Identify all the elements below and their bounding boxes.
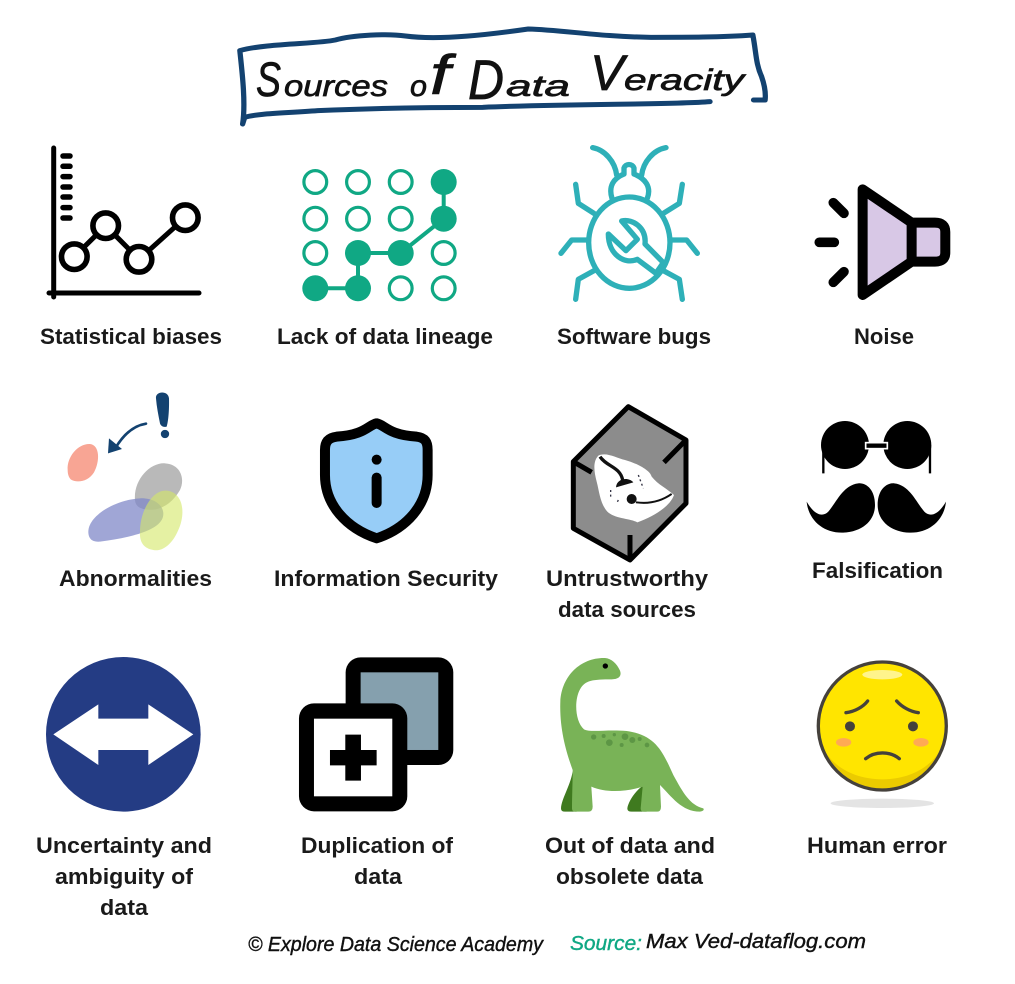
title text: f	[430, 43, 457, 106]
label: noise: Noise	[854, 324, 914, 349]
title: hand-drawn frame and heading	[240, 29, 765, 124]
label: human error: Human error	[807, 833, 947, 858]
label: statistical biases: Statistical biases	[40, 324, 222, 349]
title text: ources	[284, 70, 388, 103]
icon: shield with info mark	[325, 423, 428, 538]
label: out of data and obsolete data	[545, 833, 715, 889]
title text: S	[256, 54, 281, 107]
label: untrustworthy data sources: Untrustworthy	[546, 566, 709, 591]
icon: double arrow circle	[46, 657, 201, 812]
label: uncertainty and ambiguity of data	[36, 833, 212, 920]
icon: duplicate squares	[299, 657, 453, 811]
label: duplication of data: Duplication of	[301, 833, 454, 858]
icon: line chart	[49, 148, 199, 297]
footer source name: Max Ved-dataflog.com	[646, 931, 866, 953]
title text: o	[410, 70, 427, 103]
title text: eracity	[624, 64, 747, 97]
label: software bugs: Software bugs	[557, 324, 711, 349]
footer credit: © Explore Data Science Academy	[248, 934, 544, 956]
label: out of data and obsolete data: obsolete data	[556, 864, 704, 889]
title text: V	[590, 45, 629, 101]
title text: ata	[506, 70, 570, 103]
icon: glasses and moustache	[807, 421, 946, 533]
icon: worried face	[818, 662, 946, 808]
label: untrustworthy data sources	[546, 566, 709, 622]
label: out of data and obsolete data: Out of data and	[545, 833, 715, 858]
icon: speaker noise	[819, 189, 945, 295]
label: uncertainty and ambiguity of data: data	[100, 895, 149, 920]
icon: bug with wrench	[561, 148, 697, 299]
label: uncertainty and ambiguity of data: Uncertainty and	[36, 833, 212, 858]
footer credit and source	[248, 931, 866, 956]
footer source label: Source:	[570, 933, 642, 955]
label: abnormalities: Abnormalities	[59, 566, 212, 591]
label: falsification: Falsification	[812, 558, 943, 583]
icon: abnormalities blobs	[68, 392, 182, 550]
label: uncertainty and ambiguity of data: ambiguity of	[55, 864, 194, 889]
label: duplication of data: data	[354, 864, 403, 889]
label: untrustworthy data sources: data sources	[558, 597, 696, 622]
icon: untrustworthy box with plug	[573, 407, 686, 560]
title text	[256, 43, 747, 111]
title text: D	[468, 48, 504, 111]
title frame	[240, 29, 765, 124]
icon: data lineage grid	[302, 169, 457, 301]
label: lack of data lineage: Lack of data lineage	[277, 324, 493, 349]
icon: dinosaur	[560, 658, 704, 812]
label: duplication of data	[301, 833, 454, 889]
label: information security: Information Security	[274, 566, 499, 591]
